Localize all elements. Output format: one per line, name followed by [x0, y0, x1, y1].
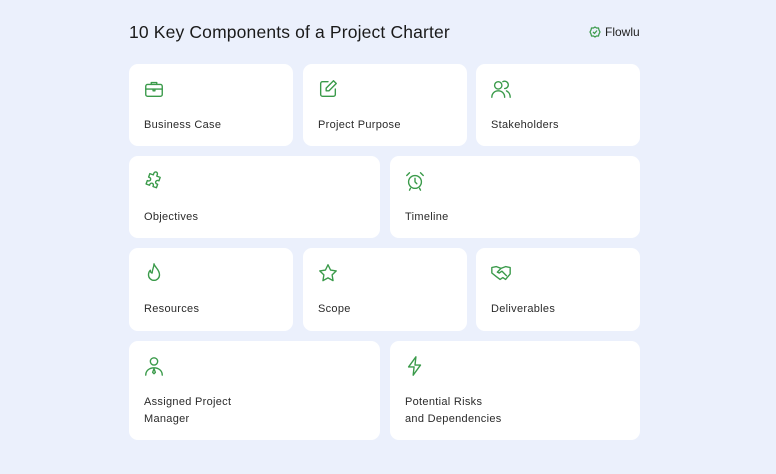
card: stakeholders: Stakeholders — [491, 119, 559, 131]
card: potential risks — [390, 341, 640, 440]
card: business case — [129, 64, 293, 146]
logo — [589, 25, 640, 39]
card: potential risks: Potential Risks — [405, 396, 482, 408]
card: objectives: Objectives — [144, 211, 198, 223]
card: deliverables — [476, 248, 640, 331]
logo: Flowlu — [605, 25, 640, 39]
card: assigned project manager: Assigned Project — [144, 396, 231, 408]
card: timeline: Timeline — [405, 211, 449, 223]
card: assigned project manager: Manager — [144, 413, 190, 425]
card: scope: Scope — [318, 303, 351, 315]
card: project purpose: Project Purpose — [318, 119, 401, 131]
card: assigned project manager — [129, 341, 380, 440]
title: 10 Key Components of a Project Charter — [129, 22, 450, 42]
card: potential risks: and Dependencies — [405, 413, 502, 425]
card: deliverables: Deliverables — [491, 303, 555, 315]
card: resources: Resources — [144, 303, 199, 315]
card: project purpose — [303, 64, 467, 146]
card: resources — [129, 248, 293, 331]
card: stakeholders — [476, 64, 640, 146]
card: scope — [303, 248, 467, 331]
card: objectives — [129, 156, 380, 238]
card: business case: Business Case — [144, 119, 221, 131]
card: timeline — [390, 156, 640, 238]
